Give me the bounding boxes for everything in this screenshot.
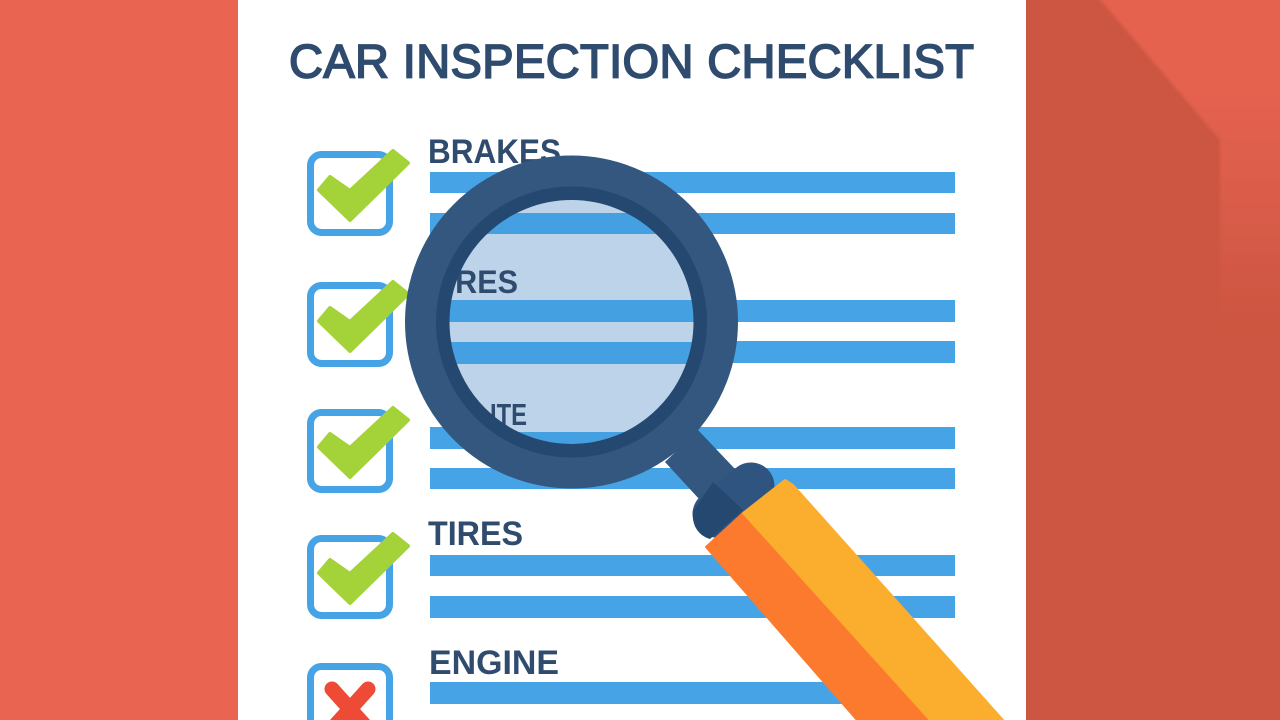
label: engine: ENGINE — [429, 644, 559, 682]
row 1: brakes — [310, 133, 955, 234]
magnifier collar — [693, 482, 751, 539]
label: brakes: BRAKES — [428, 133, 561, 171]
icon: green check, brakes — [319, 151, 408, 220]
icon: green check, row 2 — [319, 282, 408, 351]
lens label: tires: TIRES — [428, 264, 518, 300]
text lines: tires — [430, 555, 955, 618]
magnifying glass — [420, 171, 1003, 720]
icon: green check, tires — [319, 534, 408, 603]
text lines: row 2 — [430, 300, 955, 363]
checklist paper — [238, 0, 1026, 720]
text lines: brakes — [430, 172, 955, 234]
lens rim: inner dark ring — [442, 193, 700, 451]
icon: red cross, engine — [332, 689, 368, 720]
row 3: partly hidden item — [310, 408, 955, 490]
background: shadowed right side — [1024, 0, 1280, 720]
checkbox: engine — [310, 666, 390, 720]
row 4: tires — [310, 515, 955, 618]
handle — [706, 480, 1003, 720]
checkbox: brakes — [310, 154, 390, 232]
magnifier neck — [665, 430, 735, 500]
lens with magnified content — [450, 200, 694, 432]
background: coral left side — [0, 0, 240, 720]
text line: engine — [430, 682, 955, 704]
lens rim: outer ring — [420, 171, 722, 473]
row 5: engine — [310, 644, 955, 720]
checkbox: row 2 — [310, 286, 390, 364]
icon: green check, row 3 — [319, 408, 408, 477]
label: tires: TIRES — [428, 515, 523, 553]
title: CAR INSPECTION CHECKLIST — [289, 34, 974, 88]
row 2: tires, under the lens — [310, 282, 955, 364]
text lines: row 3 — [430, 427, 955, 489]
checkbox: tires — [310, 538, 390, 616]
checkbox: row 3 — [310, 412, 390, 490]
lens label: partly hidden: ITE — [490, 397, 527, 432]
